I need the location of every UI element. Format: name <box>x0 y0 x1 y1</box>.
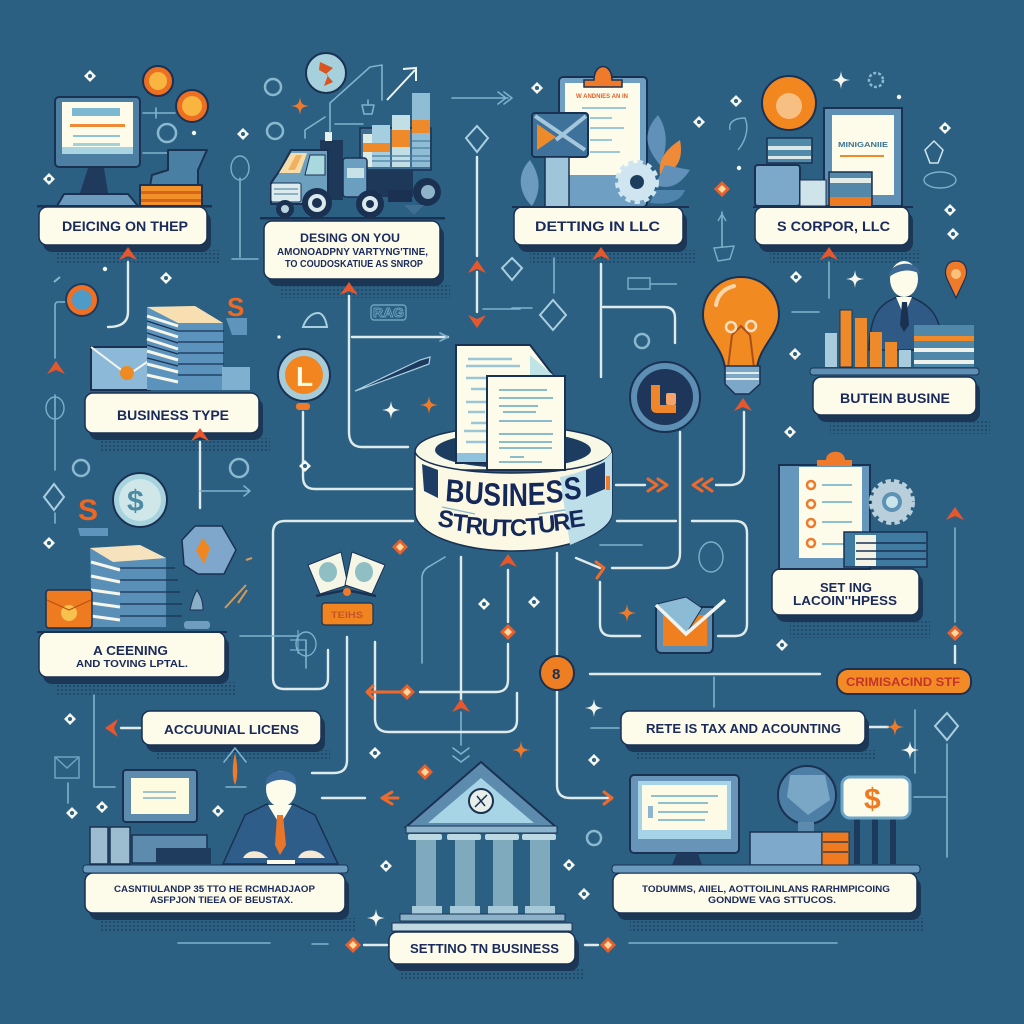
icon: dollar coin <box>113 473 167 527</box>
card: setting <box>772 569 923 622</box>
icon: light bulb <box>703 277 779 394</box>
card: designing: TO COUDOSKATIUE AS SNROP <box>285 259 423 270</box>
icon: computer and printer, top left <box>37 97 212 208</box>
orange tag <box>322 603 373 625</box>
icon: paper stack, gear and orange envelope <box>37 526 236 633</box>
card: todumms: TODUMMS, AIIEL, AOTTOILINLANS RARHMPICOING <box>642 884 890 894</box>
orange tag: TEIHS <box>331 610 363 620</box>
orange pill label <box>837 669 971 694</box>
icon: L magnifier badge <box>278 349 330 410</box>
card: todumms <box>613 873 921 920</box>
card: a ceening: AND TOVING LPTAL. <box>76 659 188 670</box>
icon: dollar coin: $ <box>127 485 144 518</box>
central band with documents: STRUTCTURE <box>436 505 587 542</box>
orange arrow markers <box>47 97 964 953</box>
document front <box>487 376 565 470</box>
icon: bank building <box>392 762 572 931</box>
card: deciding: DEICING ON THEP <box>62 218 188 234</box>
orange pill label: CRIMISACIND STF <box>846 675 960 689</box>
icon: monitor, globe and dollar sign: $ <box>864 783 881 816</box>
icon: orange check box <box>656 597 725 653</box>
halftone card shadows <box>55 250 990 981</box>
icon: orange badge on center line <box>540 656 574 690</box>
icon: money bills <box>308 552 385 596</box>
icon: orange badge on center line: 8 <box>552 666 560 683</box>
icon: envelope and paper stack <box>91 306 250 390</box>
card: S corp <box>755 207 913 252</box>
icon: businessman with bars <box>810 261 979 375</box>
card: designing: DESING ON YOU <box>300 233 400 245</box>
card: build business: BUTEIN BUSINE <box>840 390 950 406</box>
band side tabs <box>422 464 438 498</box>
small sparkles and dots: RAG <box>373 305 404 320</box>
icon: truck with chart <box>260 65 445 220</box>
card: LLC: DETTING IN LLC <box>535 218 660 234</box>
band body <box>415 452 612 551</box>
card: setting: SET ING <box>820 581 872 595</box>
icon: pen <box>355 357 430 391</box>
central band with documents <box>415 345 612 551</box>
document back <box>456 345 553 463</box>
icon: orange ball, clipboard and stacks: MINIGANIIE <box>838 142 888 149</box>
card: casntiul: CASNTIULANDP 35 TTO HE RCMHADJAOP <box>114 884 315 894</box>
card: todumms: GONDWE VAG STTUCOS. <box>708 895 836 905</box>
small sparkles and dots <box>43 70 959 927</box>
card: build business <box>813 377 980 422</box>
card: business type <box>85 393 263 440</box>
icon: small orange dollar: S <box>78 494 98 527</box>
icon: globe badge <box>306 53 346 93</box>
icon: orange dollar sign, left: S <box>227 292 244 322</box>
icon: orange ball, clipboard and stacks <box>753 76 913 208</box>
icon: spear marker <box>224 748 246 787</box>
icon: L magnifier badge: L <box>296 361 313 392</box>
connector lines <box>55 92 955 945</box>
card: accuunial licens <box>142 711 325 752</box>
band back rim <box>415 426 612 470</box>
card: tax and accounting <box>621 711 869 752</box>
card: designing <box>264 221 444 286</box>
card: setting: LACOIN''HPESS <box>793 594 897 608</box>
card: LLC <box>514 207 687 252</box>
band title: BUSINESS <box>444 470 583 514</box>
card: designing: AMONOADPNY VARTYNG'TINE, <box>277 247 428 258</box>
card: setting in business <box>389 932 579 971</box>
band hole <box>435 432 591 468</box>
card: setting in business: SETTINO TN BUSINESS <box>410 941 559 956</box>
icon: small orange dollar <box>78 494 108 536</box>
card: casntiul <box>85 873 349 920</box>
card: tax and accounting: RETE IS TAX AND ACOUNTING <box>646 722 841 736</box>
icon: orange dollar sign, left <box>226 292 247 335</box>
icon: diamond outlines <box>44 126 958 740</box>
card: business type: BUSINESS TYPE <box>117 407 229 423</box>
icon: orange coins <box>143 66 208 122</box>
card: a ceening <box>39 632 229 684</box>
icon: clipboard with envelope and gear <box>512 66 690 208</box>
card: deciding <box>39 207 211 252</box>
card: S corp: S CORPOR, LLC <box>777 218 890 234</box>
card: accuunial licens: ACCUUNIAL LICENS <box>164 722 299 737</box>
icon: clipboard with envelope and gear: W ANDNIES AN IN <box>576 93 628 100</box>
icon: orange ring badge <box>65 283 99 317</box>
icon: location pin <box>946 261 966 298</box>
icon: magnifier L badge <box>630 362 700 432</box>
icon: desk computer and businessman <box>83 770 348 873</box>
card: a ceening: A CEENING <box>93 644 168 658</box>
icon: monitor, globe and dollar sign <box>612 766 920 873</box>
icon: checklist clipboard <box>779 452 927 569</box>
card: casntiul: ASFPJON TIEEA OF BEUSTAX. <box>150 895 293 905</box>
